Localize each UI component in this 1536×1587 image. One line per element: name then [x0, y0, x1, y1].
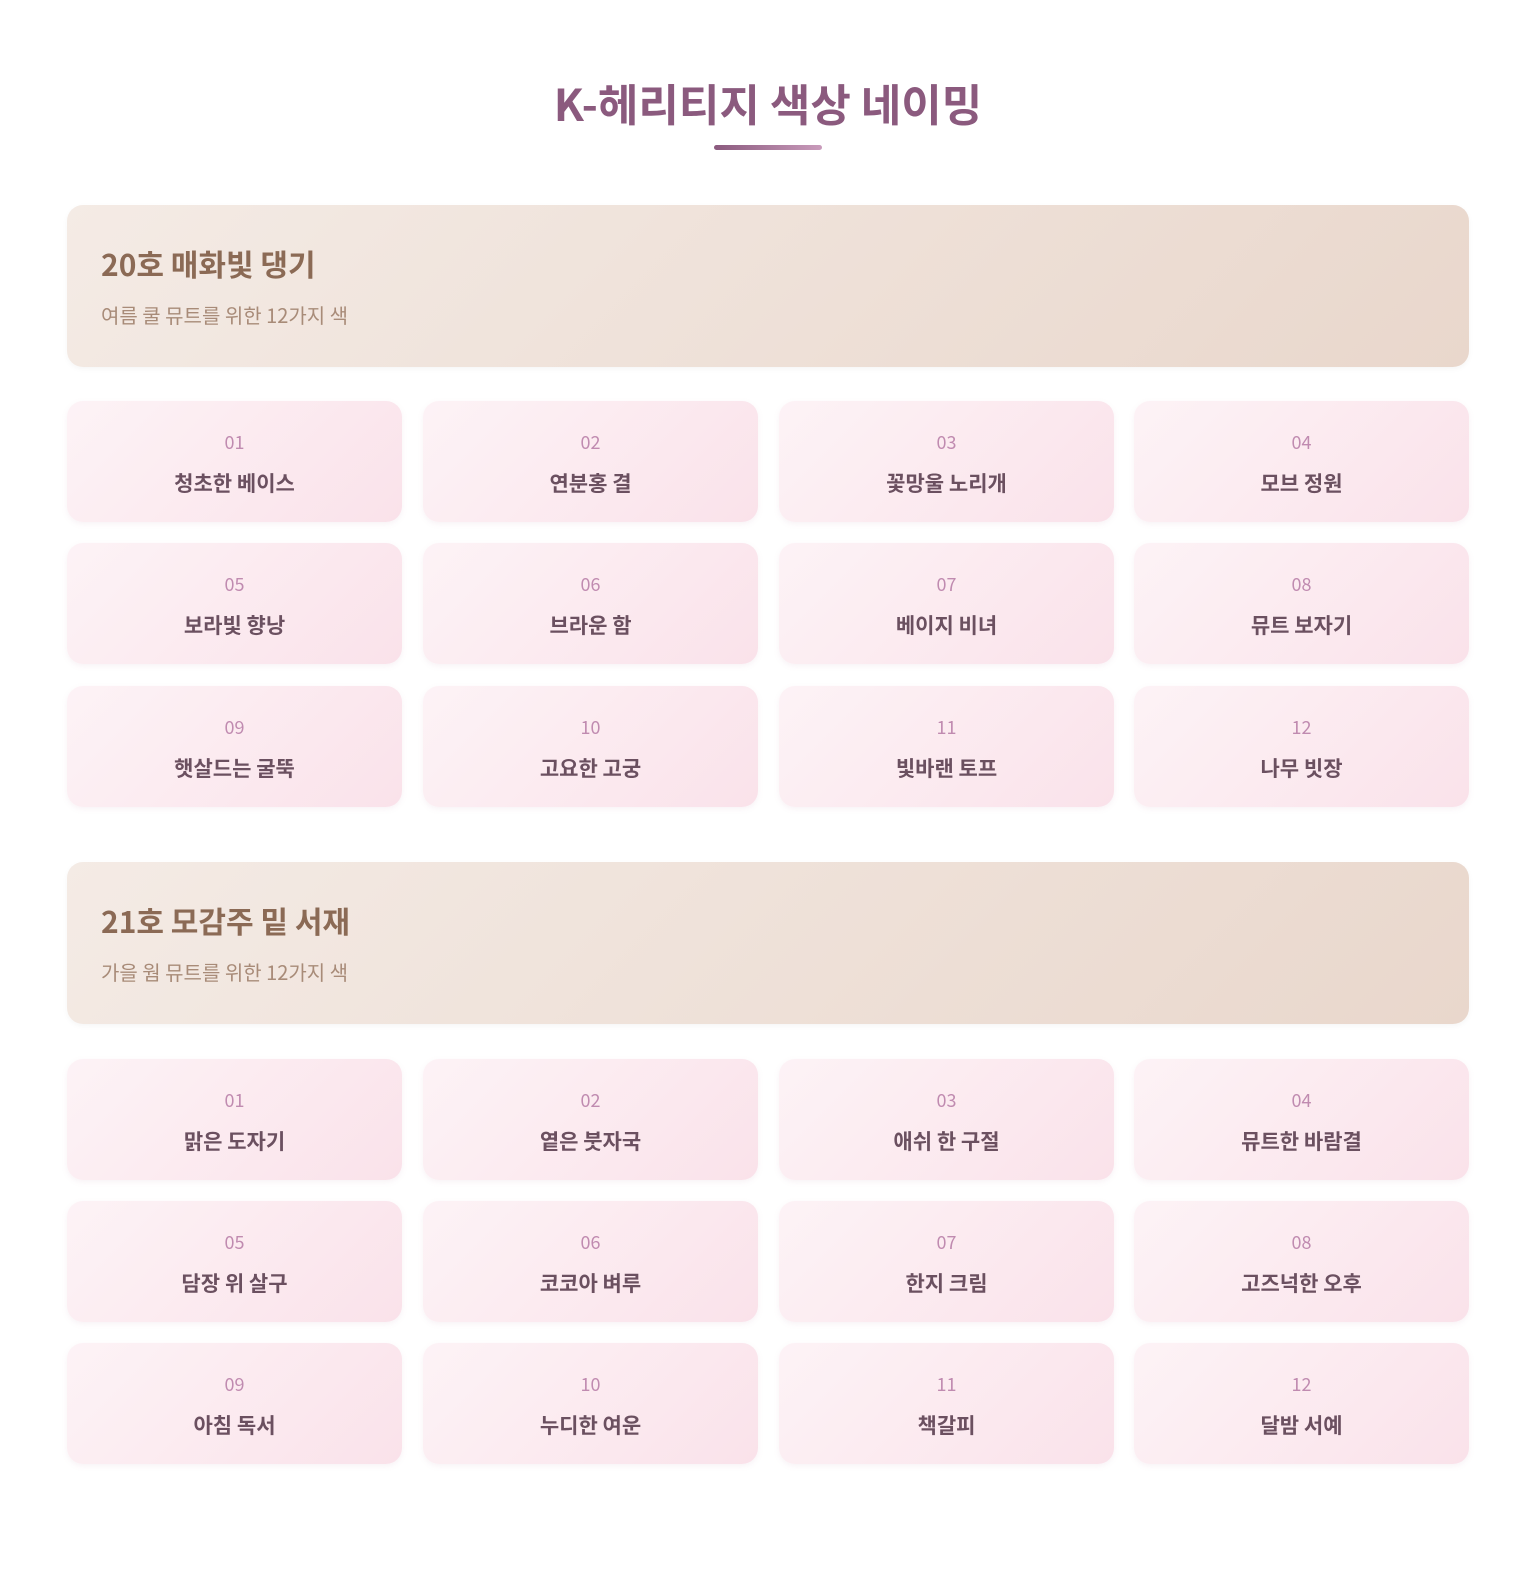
card 03: 03: [936, 1087, 956, 1113]
card 09: 09: [224, 714, 244, 740]
card 12: 나무 빗장: [1260, 753, 1343, 783]
card 03: [779, 1059, 1114, 1180]
card 11: 11: [936, 714, 956, 740]
card 06: [423, 1201, 758, 1322]
card 02: 02: [580, 429, 600, 455]
card 09: [67, 1343, 402, 1464]
card 02: 02: [580, 1087, 600, 1113]
section header: 21호: 21호 모감주 밑 서재: [101, 898, 350, 942]
card 08: 08: [1292, 571, 1311, 597]
card 06: 06: [580, 1229, 600, 1255]
card 11: [779, 686, 1114, 807]
card 12: 달밤 서예: [1260, 1410, 1343, 1440]
card 10: [423, 1343, 758, 1464]
card 02: 연분홍 결: [549, 468, 632, 498]
card 09: 아침 독서: [193, 1410, 276, 1440]
card 11: 11: [936, 1371, 956, 1397]
card 04: 모브 정원: [1260, 468, 1343, 498]
card 08: [1134, 543, 1469, 664]
card 03: 꽃망울 노리개: [886, 468, 1007, 498]
title: K-헤리티지 색상 네이밍: [554, 70, 982, 134]
card 05: 보라빛 향낭: [184, 610, 285, 640]
card 01: 01: [224, 429, 244, 455]
card 01: [67, 401, 402, 522]
card 09: [67, 686, 402, 807]
section header: 20호: 여름 쿨 뮤트를 위한 12가지 색: [101, 300, 348, 329]
card 06: [423, 543, 758, 664]
card 07: [779, 543, 1114, 664]
card 05: 담장 위 살구: [181, 1268, 288, 1298]
card 04: 04: [1292, 429, 1311, 455]
card 01: [67, 1059, 402, 1180]
card 01: 청초한 베이스: [174, 468, 295, 498]
card 02: [423, 1059, 758, 1180]
card 12: 12: [1292, 714, 1311, 740]
card 12: [1134, 686, 1469, 807]
card 03: [779, 401, 1114, 522]
section header: 20호: [67, 205, 1469, 367]
card 04: 04: [1292, 1087, 1311, 1113]
card 12: [1134, 1343, 1469, 1464]
card 11: 책갈피: [918, 1410, 975, 1440]
card 03: 애쉬 한 구절: [893, 1126, 1000, 1156]
card 04: 뮤트한 바람결: [1241, 1126, 1362, 1156]
card 06: 06: [580, 571, 600, 597]
card 07: 07: [936, 1229, 956, 1255]
card 08: 고즈넉한 오후: [1241, 1268, 1362, 1298]
grid: 20호 colors: [67, 401, 1469, 808]
section header: 21호: [67, 862, 1469, 1024]
card 03: 03: [936, 429, 956, 455]
card 01: 01: [224, 1087, 244, 1113]
card 05: 05: [224, 1229, 244, 1255]
card 04: [1134, 401, 1469, 522]
card 07: 베이지 비녀: [896, 610, 997, 640]
card 06: 코코아 벼루: [540, 1268, 641, 1298]
card 01: 맑은 도자기: [184, 1126, 285, 1156]
section header: 20호: 20호 매화빛 댕기: [101, 241, 316, 285]
section header: 21호: 가을 웜 뮤트를 위한 12가지 색: [101, 957, 348, 986]
card 07: 한지 크림: [905, 1268, 988, 1298]
card 08: [1134, 1201, 1469, 1322]
card 12: 12: [1292, 1371, 1311, 1397]
title underline: [714, 145, 822, 150]
card 08: 08: [1292, 1229, 1311, 1255]
card 02: 옅은 붓자국: [540, 1126, 641, 1156]
card 10: [423, 686, 758, 807]
grid: 21호 colors: [67, 1059, 1469, 1465]
card 10: 고요한 고궁: [540, 753, 641, 783]
card 10: 10: [580, 714, 600, 740]
card 05: [67, 543, 402, 664]
card 11: [779, 1343, 1114, 1464]
card 05: [67, 1201, 402, 1322]
card 10: 10: [580, 1371, 600, 1397]
card 02: [423, 401, 758, 522]
card 11: 빛바랜 토프: [896, 753, 997, 783]
card 07: 07: [936, 571, 956, 597]
card 08: 뮤트 보자기: [1251, 610, 1352, 640]
card 06: 브라운 함: [549, 610, 632, 640]
card 07: [779, 1201, 1114, 1322]
card 04: [1134, 1059, 1469, 1180]
card 05: 05: [224, 571, 244, 597]
card 09: 햇살드는 굴뚝: [174, 753, 295, 783]
card 09: 09: [224, 1371, 244, 1397]
card 10: 누디한 여운: [540, 1410, 641, 1440]
